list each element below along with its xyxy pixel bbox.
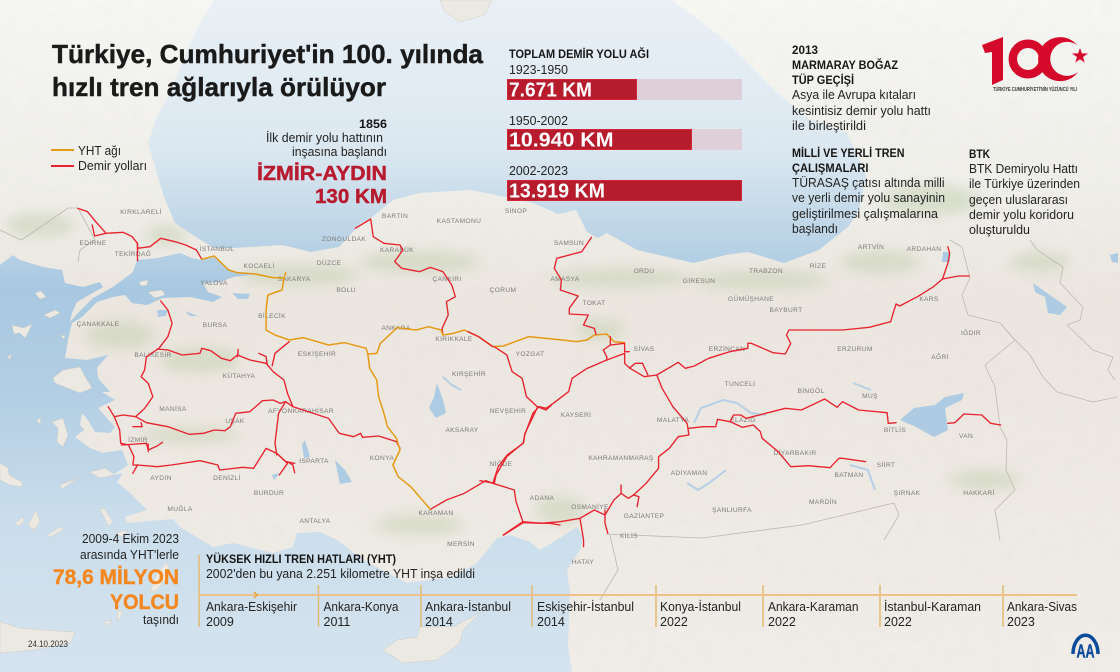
- bar chart: total railway network: 1950-2002: [509, 114, 568, 128]
- text block: BTK: ile Türkiye üzerinden: [969, 177, 1080, 191]
- text block: national train: başlandı: [792, 222, 838, 236]
- callout: first railway 1856: İlk demir yolu hattının: [266, 131, 383, 145]
- text block: BTK: geçen uluslararası: [969, 193, 1068, 207]
- bar chart: total railway network: TOPLAM DEMİR YOLU AĞI: [509, 48, 649, 61]
- map place labels: MALATYA: [657, 417, 689, 424]
- map place labels: AMASYA: [550, 276, 580, 283]
- timeline: 2022: [768, 615, 796, 629]
- timeline: Konya-İstanbul: [660, 600, 741, 614]
- map place labels: KIRIKKALE: [435, 336, 473, 343]
- bar chart: total railway network: 7.671 KM: [509, 80, 592, 102]
- timeline: [199, 555, 1077, 629]
- map place labels: KİLİS: [620, 531, 638, 540]
- map place labels: HATAY: [572, 559, 594, 566]
- map place labels: EDİRNE: [79, 238, 107, 247]
- title: Türkiye, Cumhuriyet'in 100. yılında: [52, 39, 484, 69]
- text block: national train: MİLLİ VE YERLİ TREN: [792, 147, 904, 160]
- map place labels: ORDU: [634, 268, 654, 275]
- callout: passengers: arasında YHT'lerle: [80, 548, 179, 562]
- map place labels: AFYONKARAHİSAR: [268, 406, 334, 415]
- timeline: 2014: [537, 615, 565, 629]
- map place labels: BİLECİK: [258, 311, 286, 320]
- icon: 100th anniversary logo: TÜRKİYE CUMHURİYETİ'NİN YÜZÜNCÜ YILI: [993, 86, 1077, 93]
- map place labels: ÇANAKKALE: [77, 321, 120, 328]
- map place labels: MANİSA: [159, 404, 187, 413]
- map place labels: DENİZLİ: [213, 473, 241, 482]
- map place labels: BALIKESİR: [134, 350, 172, 359]
- timeline: 2022: [884, 615, 912, 629]
- map place labels: KARABÜK: [380, 246, 414, 254]
- map place labels: MUĞLA: [167, 504, 193, 513]
- timeline: Ankara-İstanbul: [425, 600, 511, 614]
- timeline: 2011: [324, 615, 350, 629]
- map place labels: YOZGAT: [516, 351, 544, 358]
- heading: YHT lines: 2002'den bu yana 2.251 kilometre YHT inşa edildi: [206, 567, 475, 581]
- map place labels: ŞIRNAK: [894, 490, 921, 497]
- map place labels: ELAZIĞ: [730, 415, 756, 424]
- sea: Aegean, Marmara and Mediterranean: [0, 253, 583, 672]
- bar chart: total railway network: 13.919 KM: [509, 180, 605, 202]
- map place labels: İSTANBUL: [200, 244, 234, 253]
- map place labels: ARTVİN: [858, 242, 884, 251]
- map place labels: BURDUR: [254, 490, 284, 497]
- map place labels: SİVAS: [634, 344, 655, 353]
- timeline: Ankara-Konya: [324, 600, 399, 614]
- callout: first railway 1856: 130 KM: [315, 186, 387, 208]
- islands and Crimea: [0, 0, 492, 663]
- callout: first railway 1856: 1856: [359, 119, 387, 131]
- map place labels: TUNCELİ: [725, 379, 755, 388]
- timeline: Ankara-Eskişehir: [206, 600, 297, 614]
- map place labels: ŞANLIURFA: [712, 507, 752, 514]
- map place labels: GİRESUN: [683, 276, 715, 285]
- map place labels: KIRKLARELİ: [120, 207, 162, 216]
- text block: national train: TÜRASAŞ çatısı altında milli: [792, 176, 944, 190]
- map place labels: BOLU: [336, 287, 356, 294]
- map place labels: UŞAK: [225, 418, 245, 425]
- map place labels: MUŞ: [862, 393, 878, 400]
- map place labels: AKSARAY: [445, 427, 479, 434]
- map place labels: GAZİANTEP: [624, 511, 665, 520]
- bar chart: total railway network: 10.940 KM: [509, 130, 614, 152]
- callout: passengers: YOLCU: [110, 591, 179, 614]
- map place labels: VAN: [959, 433, 973, 440]
- text block: Marmaray: Asya ile Avrupa kıtaları: [792, 88, 916, 102]
- heading: YHT lines: YÜKSEK HIZLI TREN HATLARI (YHT): [206, 553, 396, 566]
- callout: passengers: 2009-4 Ekim 2023: [82, 532, 179, 546]
- legend: Demir yolları: [78, 159, 147, 173]
- map place labels: KAYSERİ: [561, 410, 591, 419]
- map place labels: ANKARA: [381, 325, 411, 332]
- map place labels: TEKİRDAĞ: [115, 249, 151, 258]
- map place labels: HAKKARİ: [963, 488, 995, 497]
- text block: national train: [792, 147, 945, 236]
- map place labels: BURSA: [203, 322, 227, 329]
- timeline: 2009: [206, 615, 234, 629]
- timeline: Ankara-Karaman: [768, 600, 859, 614]
- timeline: 2014: [425, 615, 453, 629]
- text block: BTK: demir yolu koridoru: [969, 208, 1074, 222]
- map place labels: ADANA: [530, 495, 554, 502]
- map place labels: YALOVA: [200, 280, 228, 287]
- text block: BTK: oluşturuldu: [969, 223, 1030, 237]
- railway network: conventional lines (red), east: [468, 237, 1001, 547]
- map place labels: BİTLİS: [884, 425, 906, 434]
- map place labels: BARTIN: [382, 213, 408, 220]
- callout: passengers: 78,6 MİLYON: [53, 566, 179, 589]
- bar chart: total railway network: [507, 48, 742, 202]
- callout: passengers: [53, 532, 179, 627]
- callout: first railway 1856: İZMİR-AYDIN: [257, 162, 387, 185]
- map place labels: KASTAMONU: [437, 218, 481, 225]
- title: [52, 39, 484, 102]
- map place labels: SAKARYA: [278, 276, 311, 283]
- icon: 100th anniversary logo: [982, 37, 1088, 93]
- text block: BTK: [969, 149, 1080, 237]
- map place labels: KONYA: [370, 455, 394, 462]
- map place labels: DÜZCE: [317, 259, 341, 267]
- callout: first railway 1856: inşasına başlandı: [292, 145, 387, 159]
- callout: passengers: taşındı: [143, 613, 179, 627]
- map place labels: ZONGULDAK: [322, 236, 366, 243]
- text block: Marmaray: kesintisiz demir yolu hattı: [792, 104, 931, 118]
- map place labels: SİNOP: [505, 206, 527, 215]
- map place labels: BİNGÖL: [797, 386, 825, 395]
- map place labels: RİZE: [810, 261, 826, 270]
- text block: Marmaray: [792, 45, 931, 133]
- map place labels: BATMAN: [834, 472, 864, 479]
- map place labels: NEVŞEHİR: [490, 406, 526, 415]
- callout: first railway 1856: [257, 119, 387, 208]
- text block: BTK: BTK: [969, 149, 991, 161]
- map place labels: KOCAELİ: [243, 261, 275, 270]
- icon: AA logo: [1073, 635, 1098, 662]
- text block: Marmaray: 2013: [792, 45, 818, 57]
- map place labels: ERZİNCAN: [709, 344, 745, 353]
- map place labels: SİİRT: [877, 460, 895, 469]
- map place labels: ISPARTA: [299, 458, 329, 465]
- text block: BTK: BTK Demiryolu Hattı: [969, 162, 1078, 176]
- text block: Marmaray: MARMARAY BOĞAZ: [792, 59, 898, 72]
- bar chart: total railway network: 2002-2023: [509, 164, 568, 178]
- timeline: Ankara-Sivas: [1007, 600, 1077, 614]
- map place labels: OSMANİYE: [571, 502, 609, 511]
- map place labels: KÜTAHYA: [223, 372, 256, 380]
- heading: YHT lines: [206, 553, 475, 581]
- map place labels: GÜMÜŞHANE: [728, 295, 774, 303]
- legend: YHT ağı: [78, 144, 121, 158]
- map place labels: İZMİR: [128, 435, 148, 444]
- date: 24.10.2023: [28, 639, 68, 649]
- text block: Marmaray: TÜP GEÇİŞİ: [792, 74, 854, 87]
- map place labels: KARAMAN: [418, 510, 454, 517]
- map place labels: DİYARBAKIR: [774, 448, 816, 457]
- map place labels: SAMSUN: [554, 240, 584, 247]
- map place labels: MERSİN: [447, 539, 475, 548]
- timeline: İstanbul-Karaman: [884, 600, 981, 614]
- timeline: Eskişehir-İstanbul: [537, 600, 634, 614]
- text block: national train: ve yerli demir yolu sanayinin: [792, 191, 945, 205]
- map place labels: AYDIN: [150, 475, 172, 482]
- map place labels: KIRŞEHİR: [452, 369, 486, 378]
- text block: national train: ÇALIŞMALARI: [792, 163, 868, 175]
- map place labels: ÇORUM: [490, 287, 516, 294]
- icon: AA logo: AA: [1076, 642, 1094, 662]
- map place labels: ARDAHAN: [907, 246, 941, 253]
- text block: Marmaray: ile birleştirildi: [792, 119, 866, 133]
- map place labels: BAYBURT: [770, 307, 802, 314]
- lakes: [157, 252, 1118, 490]
- timeline: 2022: [660, 615, 688, 629]
- legend: [51, 144, 147, 173]
- map place labels: KAHRAMANMARAŞ: [588, 455, 654, 462]
- sea: Black Sea: [148, 0, 866, 263]
- high-speed network: YHT lines (orange): [202, 256, 625, 509]
- map place labels: ESKİŞEHİR: [298, 349, 336, 358]
- map place labels: ERZURUM: [837, 346, 873, 353]
- text block: national train: geliştirilmesi çalışmalarına: [792, 207, 938, 221]
- map place labels: KARS: [919, 296, 939, 303]
- map place labels: MARDİN: [809, 497, 837, 506]
- map place labels: ANTALYA: [299, 518, 331, 525]
- map place labels: IĞDIR: [961, 328, 981, 337]
- railway network: conventional lines (red), west: [78, 208, 560, 535]
- bar chart: total railway network: 1923-1950: [509, 63, 568, 77]
- map place labels: AĞRI: [931, 352, 949, 361]
- map place labels: ADIYAMAN: [671, 470, 707, 477]
- map place labels: TRABZON: [749, 268, 783, 275]
- map place labels: ÇANKIRI: [432, 276, 462, 283]
- map place labels: NİĞDE: [490, 459, 513, 468]
- title: hızlı tren ağlarıyla örülüyor: [52, 72, 386, 102]
- map place labels: [77, 206, 995, 566]
- timeline: 2023: [1007, 615, 1035, 629]
- map place labels: TOKAT: [582, 300, 606, 307]
